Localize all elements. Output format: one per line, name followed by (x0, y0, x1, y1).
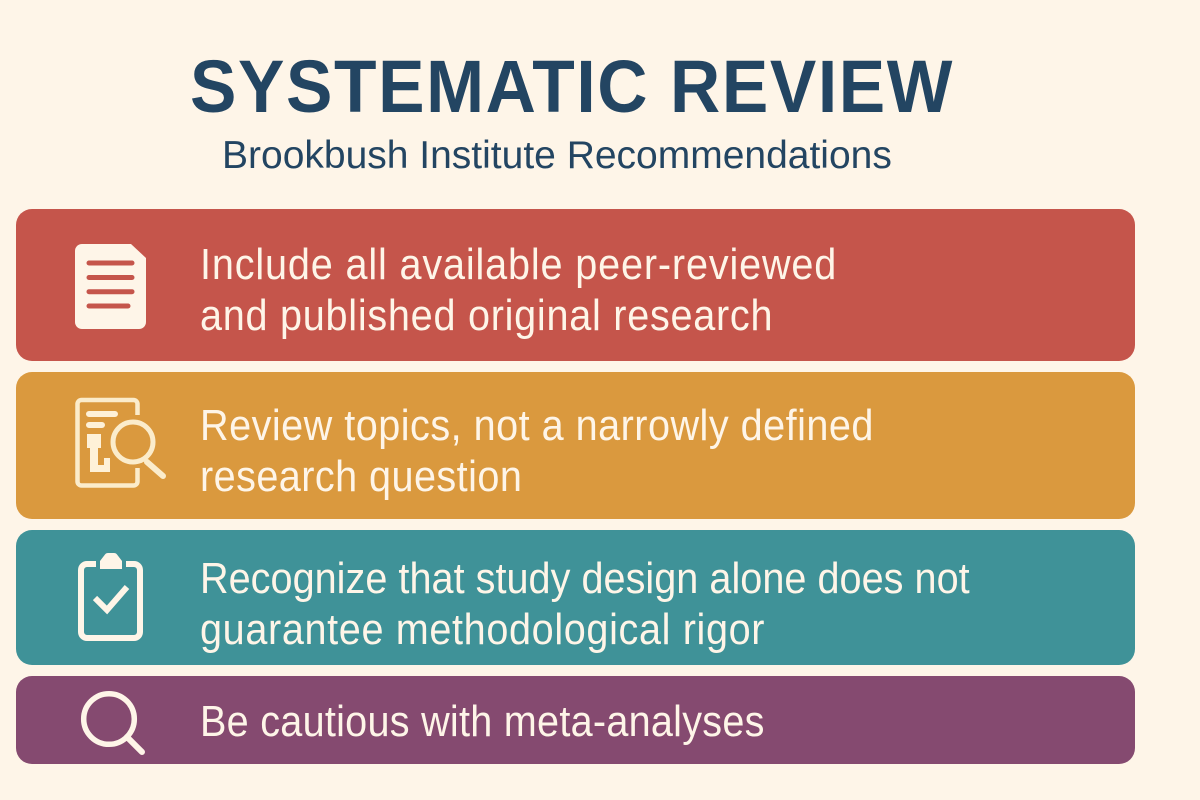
text: study design: guarantee methodological rigor (200, 605, 765, 654)
text: meta-analyses: Be cautious with meta-analyses (200, 697, 765, 746)
text: review topics (200, 401, 874, 501)
subtitle: Brookbush Institute Recommendations (222, 134, 892, 177)
panel: review topics (16, 372, 1135, 519)
icon: document with magnifier (75, 398, 166, 488)
panel: include all research (16, 209, 1135, 361)
icon: magnifier (80, 691, 145, 755)
title: SYSTEMATIC REVIEW (190, 45, 954, 128)
text: study design (200, 554, 970, 654)
panel: meta-analyses (16, 676, 1135, 764)
text: include all (200, 240, 837, 340)
panel: study design (16, 530, 1135, 665)
text: include all: and published original research (200, 291, 773, 340)
text: review topics: research question (200, 452, 522, 501)
text: include all: Include all available peer-reviewed (200, 240, 837, 289)
icon: clipboard check (78, 553, 143, 641)
icon: document (75, 244, 146, 329)
text: study design: Recognize that study design alone does not (200, 554, 970, 603)
text: review topics: Review topics, not a narrowly defined (200, 401, 874, 450)
